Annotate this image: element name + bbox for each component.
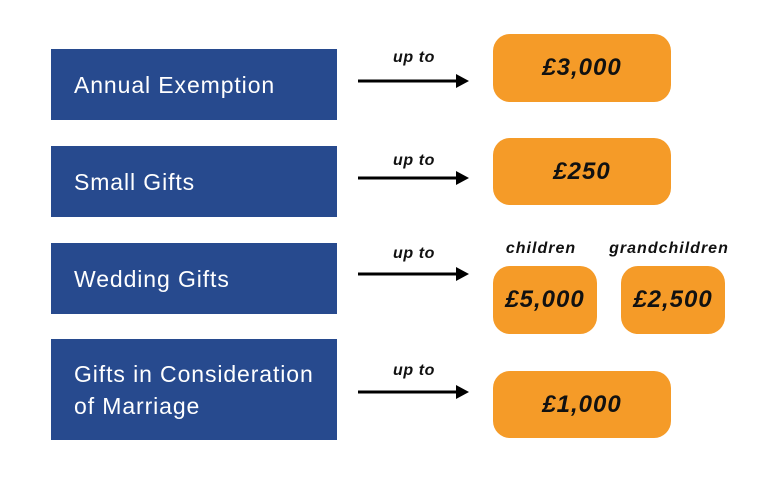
- label: wedding gifts: [51, 243, 337, 314]
- arrow 1: [358, 74, 469, 88]
- amount: 250: £250: [553, 158, 611, 184]
- amount: 5000: £5,000: [505, 286, 585, 313]
- label: gifts in consideration of marriage: of Marriage: [74, 392, 200, 418]
- amount: 2500: £2,500: [633, 286, 713, 313]
- up to text 2: up to: [393, 152, 435, 169]
- amount: 1000: £1,000: [542, 390, 622, 418]
- up to text 3: up to: [393, 245, 435, 262]
- label: small gifts: [51, 146, 337, 217]
- up to text 1: up to: [393, 49, 435, 66]
- amount: 5000: [493, 266, 597, 334]
- label: gifts in consideration of marriage: Gifts in Consideration: [74, 360, 314, 386]
- arrow 3: [358, 267, 469, 281]
- amount: 1000: [493, 371, 671, 438]
- arrow 2: [358, 171, 469, 185]
- label: small gifts: Small Gifts: [74, 168, 195, 194]
- label: grandchildren: grandchildren: [609, 240, 729, 257]
- label: children: children: [506, 240, 576, 257]
- arrow 4: [358, 385, 469, 399]
- amount: 3000: [493, 34, 671, 102]
- amount: 3000: £3,000: [542, 54, 622, 81]
- amount: 250: [493, 138, 671, 205]
- label: annual exemption: [51, 49, 337, 120]
- amount: 2500: [621, 266, 725, 334]
- label: annual exemption: Annual Exemption: [74, 72, 275, 98]
- label: wedding gifts: Wedding Gifts: [74, 266, 230, 292]
- up to text 4: up to: [393, 362, 435, 379]
- label: gifts in consideration of marriage: [51, 339, 337, 440]
